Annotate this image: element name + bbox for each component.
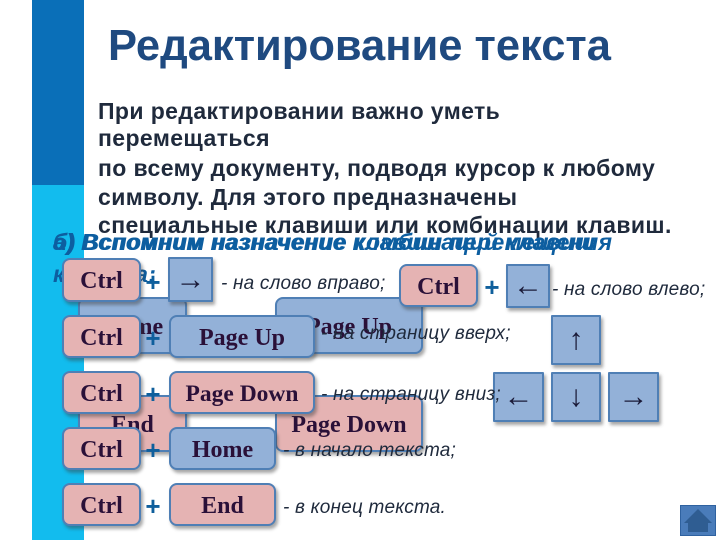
intro text: символу. Для этого предназначены <box>98 184 517 210</box>
intro text: специальные клавиши или комбинации клавиш. <box>98 212 672 238</box>
background key: End <box>78 395 187 452</box>
overlapping subheadings: курсора: <box>53 261 156 287</box>
shortcut row: word left: Ctrl <box>417 274 460 300</box>
intro text: При редактировании важно уметь <box>98 98 500 124</box>
arrow keys: → <box>618 380 648 413</box>
arrow keys: ↑ <box>568 323 584 356</box>
shortcut row: word right: Ctrl <box>80 268 123 294</box>
shortcut row: page down: Ctrl <box>80 380 123 406</box>
background key: End: End <box>111 412 154 438</box>
shortcut row: page up: Page Up <box>199 324 285 350</box>
arrow keys: ← <box>504 380 534 413</box>
shortcut row: document end: Ctrl <box>80 492 123 518</box>
overlapping subheadings: а) Вспомним назначение клавиш перемещения <box>53 229 612 255</box>
shortcut row: page down: + <box>145 379 161 409</box>
shortcut row: document end: - в конец текста. <box>283 497 446 518</box>
shortcut row: word right <box>62 257 386 307</box>
shortcut row: page down: Page Down <box>186 380 298 406</box>
overlapping subheadings <box>53 229 612 287</box>
icon: home button <box>680 505 716 536</box>
shortcut row: document start: - в начало текста; <box>283 440 456 461</box>
shortcut row: word left <box>399 264 705 313</box>
shortcut row: page down <box>62 371 501 419</box>
shortcut row: word right: - на слово вправо; <box>221 273 386 294</box>
shortcut row: page up: Ctrl <box>80 324 123 350</box>
shortcut row: word left: - на слово влево; <box>552 279 705 300</box>
arrow keys: ↓ <box>568 380 584 413</box>
shortcut row: document end: + <box>145 491 161 521</box>
shortcut row: page up: + <box>145 323 161 353</box>
shortcut row: page down: - на страницу вниз; <box>321 384 501 405</box>
background key: Page Down: Page Down <box>291 412 407 438</box>
shortcut row: word right: → <box>176 262 206 296</box>
shortcut row: page up: - на страницу вверх; <box>321 323 511 344</box>
shortcut row: word left: ← <box>513 269 543 302</box>
background key: Page Up <box>275 297 423 354</box>
intro text <box>98 98 672 238</box>
side bar <box>32 0 84 540</box>
intro text: перемещаться <box>98 125 270 151</box>
shortcut row: document end <box>62 483 446 531</box>
title: Редактирование текста <box>108 22 611 70</box>
shortcut row: page up <box>62 315 511 363</box>
shortcut row: document start: Home <box>192 436 253 462</box>
shortcut row: document start <box>62 427 456 475</box>
shortcut row: word right: + <box>145 267 161 297</box>
shortcut row: document end: End <box>201 492 244 518</box>
intro text: по всему документу, подводя курсор к любому <box>98 155 655 181</box>
background key: Page Down <box>275 395 423 452</box>
arrow keys <box>493 315 663 427</box>
background key: Home: Home <box>102 314 163 340</box>
shortcut row: word left: + <box>484 272 500 302</box>
overlapping subheadings: б) Вспомним назначение комбинаций клавиш <box>53 229 595 255</box>
background key: Home <box>78 297 187 354</box>
shortcut row: document start: + <box>145 435 161 465</box>
shortcut row: document start: Ctrl <box>80 436 123 462</box>
background key: Page Up: Page Up <box>306 314 392 340</box>
